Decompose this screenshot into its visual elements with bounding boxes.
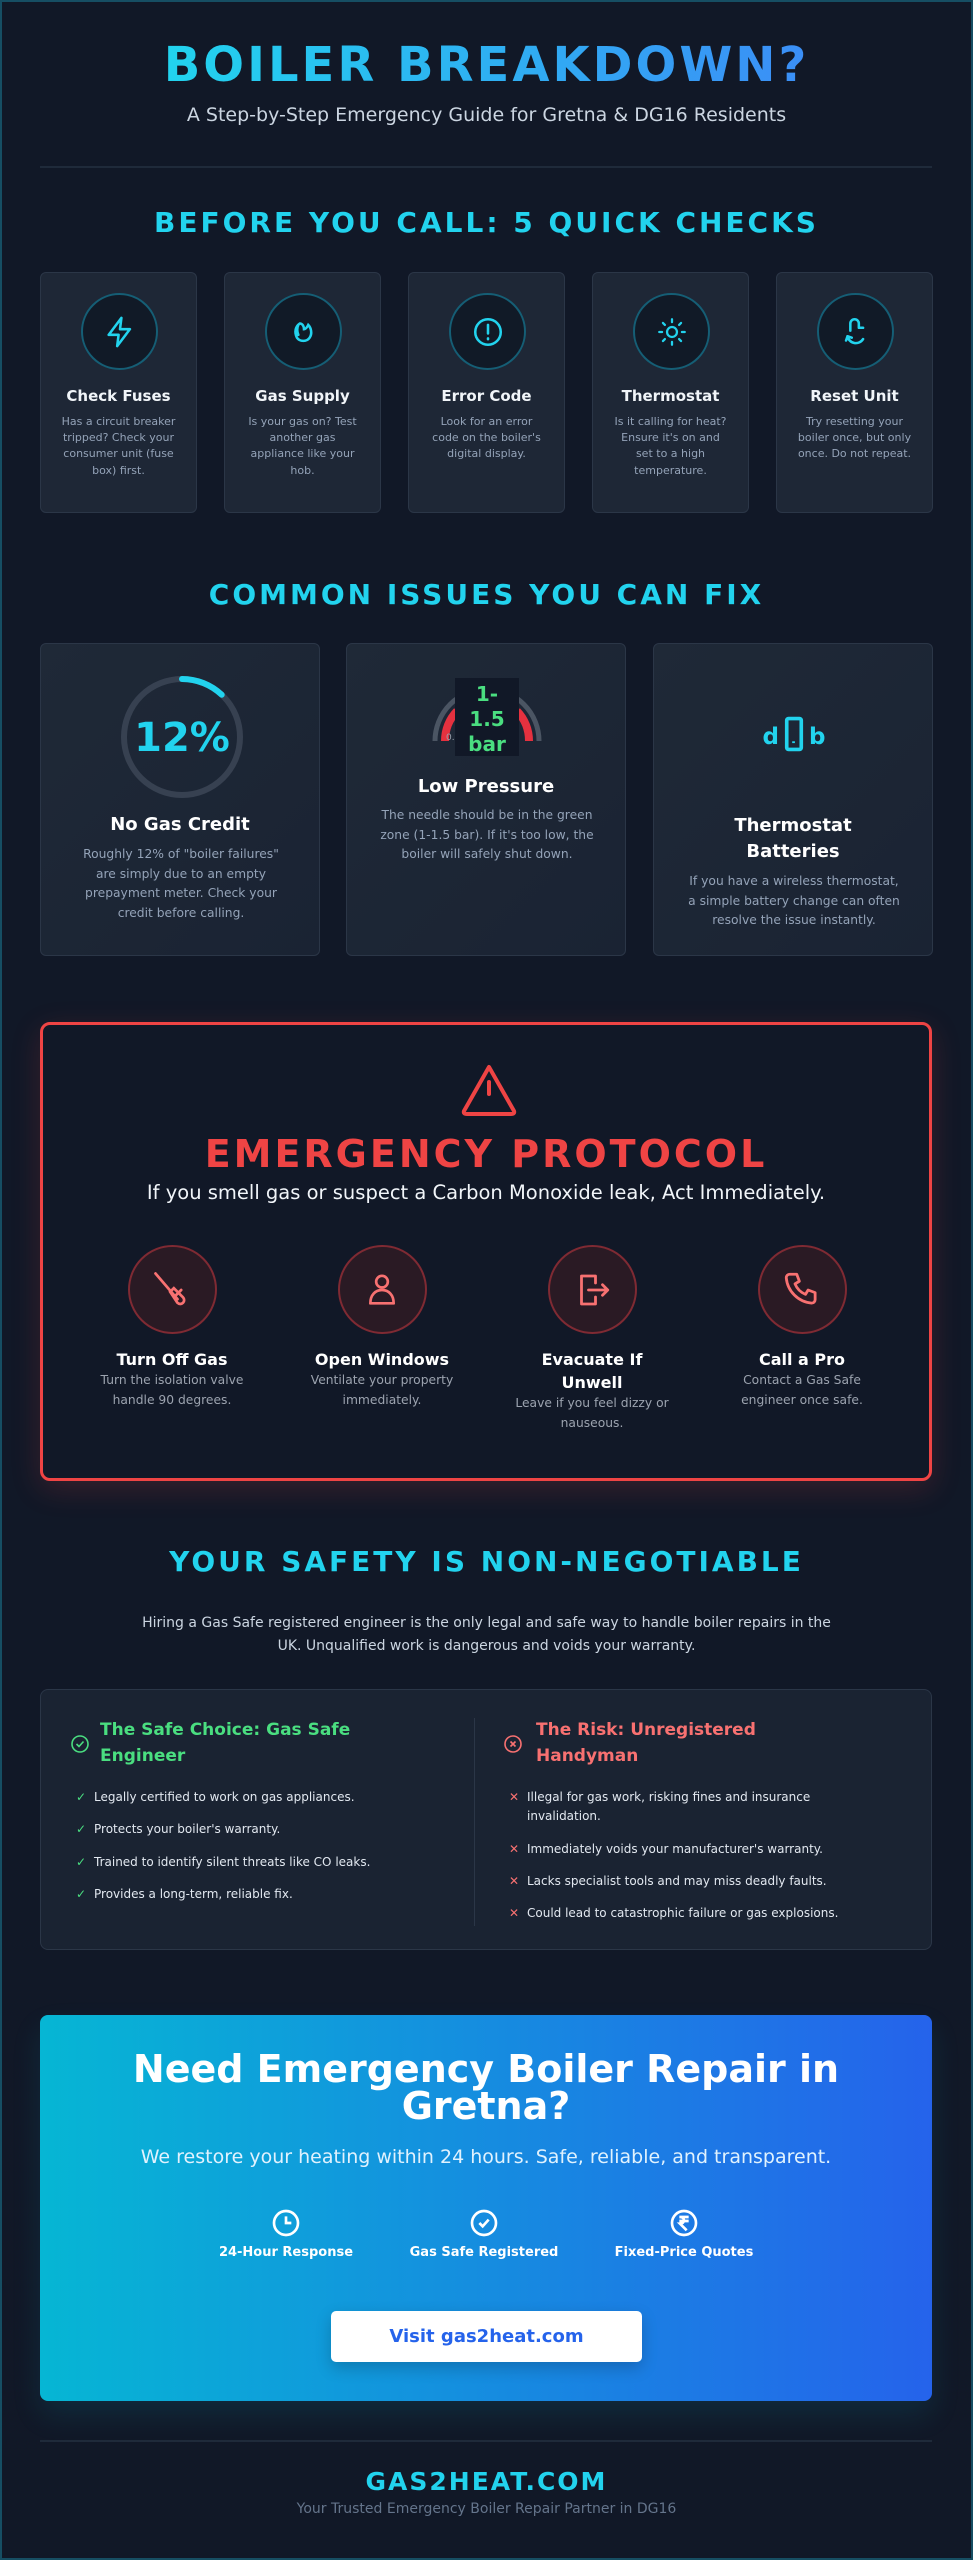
- footer brand: GAS2HEAT.COM: [366, 2467, 607, 2496]
- cta heading: Gretna?: [402, 2084, 570, 2128]
- card: gas supply: [224, 272, 381, 513]
- card: thermostat batteries: Batteries: [746, 841, 840, 862]
- step: evacuate: [515, 1245, 669, 1430]
- card: error code: Error Code: [441, 387, 532, 405]
- emergency subtitle: If you smell gas or suspect a Carbon Monoxide leak, Act Immediately.: [147, 1181, 825, 1204]
- text: Evacuate If: [542, 1350, 642, 1369]
- column: the risk: Illegal for gas work, risking fines and insurance invalidation.: [527, 1790, 810, 1823]
- card: no gas credit: Roughly 12% of "boiler failures" are simply due to an empty prepayment meter. Check your credit before calling.: [83, 847, 279, 920]
- icon: phone/battery: d b: [763, 724, 825, 750]
- card: reset unit: [776, 272, 933, 513]
- cta subtitle: We restore your heating within 24 hours. Safe, reliable, and transparent.: [141, 2146, 831, 2168]
- text: Open Windows: [315, 1350, 449, 1369]
- feature: gas safe: Gas Safe Registered: [410, 2245, 558, 2260]
- card: thermostat: Is it calling for heat? Ensure it's on and set to a high temperature.: [614, 415, 726, 477]
- title: BOILER BREAKDOWN?: [164, 37, 809, 93]
- column: the risk: ✕: [509, 1790, 519, 1804]
- column: safe choice: Provides a long-term, reliable fix.: [94, 1887, 293, 1901]
- gauge: 1-: [476, 682, 498, 706]
- column: safe choice: ✓: [76, 1887, 86, 1901]
- cta heading: Need Emergency Boiler Repair in: [133, 2047, 839, 2091]
- card: check fuses: Check Fuses: [66, 387, 171, 405]
- feature: fixed price: [615, 2210, 753, 2260]
- gauge: 1.5: [469, 707, 505, 731]
- card: thermostat batteries: If you have a wireless thermostat, a simple battery change can often resolve the issue instantly.: [688, 874, 900, 927]
- column: safe choice: Protects your boiler's warranty.: [94, 1822, 280, 1836]
- panel: quick checks: [40, 272, 933, 513]
- card: thermostat batteries: Thermostat: [734, 815, 852, 836]
- safety paragraph: Hiring a Gas Safe registered engineer is the only legal and safe way to handle boiler repairs in the UK. Unqualified work is dangerous and voids your warranty.: [142, 1615, 831, 1654]
- heading: common issues: COMMON ISSUES YOU CAN FIX: [209, 578, 764, 611]
- step: turn off gas: [100, 1245, 243, 1406]
- heading: your safety: YOUR SAFETY IS NON-NEGOTIABLE: [169, 1545, 804, 1578]
- column: the risk: ✕: [509, 1874, 519, 1888]
- card: gas supply: Is your gas on? Test another gas appliance like your hob.: [248, 415, 357, 477]
- gauge: bar: [468, 732, 506, 756]
- column: the risk: [504, 1720, 838, 1920]
- column: the risk: Lacks specialist tools and may miss deadly faults.: [527, 1874, 827, 1888]
- card: thermostat batteries: [653, 643, 933, 956]
- donut chart 12%: 12%: [134, 715, 230, 761]
- column: the risk: ✕: [509, 1842, 519, 1856]
- feature: fixed price: Fixed-Price Quotes: [615, 2245, 753, 2260]
- card: low pressure: [346, 643, 626, 956]
- feature: 24-hour: [219, 2210, 353, 2260]
- card: thermostat: Thermostat: [622, 387, 719, 405]
- panel: comparison: [40, 1689, 932, 1950]
- card: thermostat: [592, 272, 749, 513]
- column: the risk: Could lead to catastrophic failure or gas explosions.: [527, 1906, 838, 1920]
- feature: gas safe: [410, 2210, 558, 2260]
- column: the risk: ✕: [509, 1906, 519, 1920]
- text: Contact a Gas Safe engineer once safe.: [741, 1373, 863, 1406]
- card: check fuses: Has a circuit breaker tripped? Check your consumer unit (fuse box) first.: [62, 415, 175, 477]
- column: safe choice: ✓: [76, 1822, 86, 1836]
- panel: emergency protocol: [40, 1022, 932, 1481]
- icon: x circle: [504, 1735, 522, 1753]
- icon: warning triangle: [462, 1064, 516, 1116]
- card: error code: Look for an error code on the boiler's digital display.: [432, 415, 541, 460]
- card: reset unit: Reset Unit: [810, 387, 899, 405]
- text: Ventilate your property immediately.: [311, 1373, 453, 1406]
- text: Unwell: [562, 1373, 622, 1392]
- card: gas supply: Gas Supply: [255, 387, 350, 405]
- feature: 24-hour: 24-Hour Response: [219, 2245, 353, 2260]
- card: low pressure: The needle should be in the green zone (1-1.5 bar). If it's too low, the boiler will safely shut down.: [380, 808, 594, 861]
- gauge: [432, 678, 542, 756]
- button: Visit gas2heat.com: [389, 2326, 584, 2347]
- card: error code: [408, 272, 565, 513]
- subtitle: A Step-by-Step Emergency Guide for Gretna & DG16 Residents: [187, 104, 786, 126]
- column: safe choice: Trained to identify silent threats like CO leaks.: [94, 1855, 370, 1869]
- card: no gas credit: [40, 643, 320, 956]
- card: low pressure: Low Pressure: [418, 776, 554, 797]
- column: the risk: The Risk: Unregistered Handyman: [536, 1720, 756, 1766]
- text: Leave if you feel dizzy or nauseous.: [515, 1396, 669, 1430]
- button: [331, 2311, 642, 2362]
- card: no gas credit: No Gas Credit: [110, 814, 250, 835]
- card: check fuses: [40, 272, 197, 513]
- gauge: 0.: [446, 733, 455, 743]
- column: safe choice: The Safe Choice: Gas Safe Engineer: [100, 1720, 350, 1766]
- step: call a pro: [741, 1245, 863, 1406]
- emergency heading: EMERGENCY PROTOCOL: [205, 1132, 767, 1176]
- step: open windows: [310, 1245, 453, 1406]
- icon: check circle: [71, 1735, 89, 1753]
- panel: call to action: [40, 2015, 932, 2401]
- column: the risk: Immediately voids your manufacturer's warranty.: [527, 1842, 823, 1856]
- footer tagline: Your Trusted Emergency Boiler Repair Partner in DG16: [297, 2501, 676, 2517]
- text: Turn Off Gas: [116, 1350, 227, 1369]
- donut chart 12%: [121, 676, 243, 798]
- column: safe choice: ✓: [76, 1790, 86, 1804]
- column: safe choice: Legally certified to work on gas appliances.: [94, 1790, 355, 1804]
- text: Turn the isolation valve handle 90 degrees.: [101, 1373, 243, 1406]
- column: safe choice: [71, 1720, 370, 1901]
- heading: before you call: BEFORE YOU CALL: 5 QUICK CHECKS: [154, 206, 819, 239]
- cta heading: [133, 2047, 839, 2128]
- text: Call a Pro: [759, 1350, 845, 1369]
- card: reset unit: Try resetting your boiler once, but only once. Do not repeat.: [798, 415, 911, 460]
- column: safe choice: ✓: [76, 1855, 86, 1869]
